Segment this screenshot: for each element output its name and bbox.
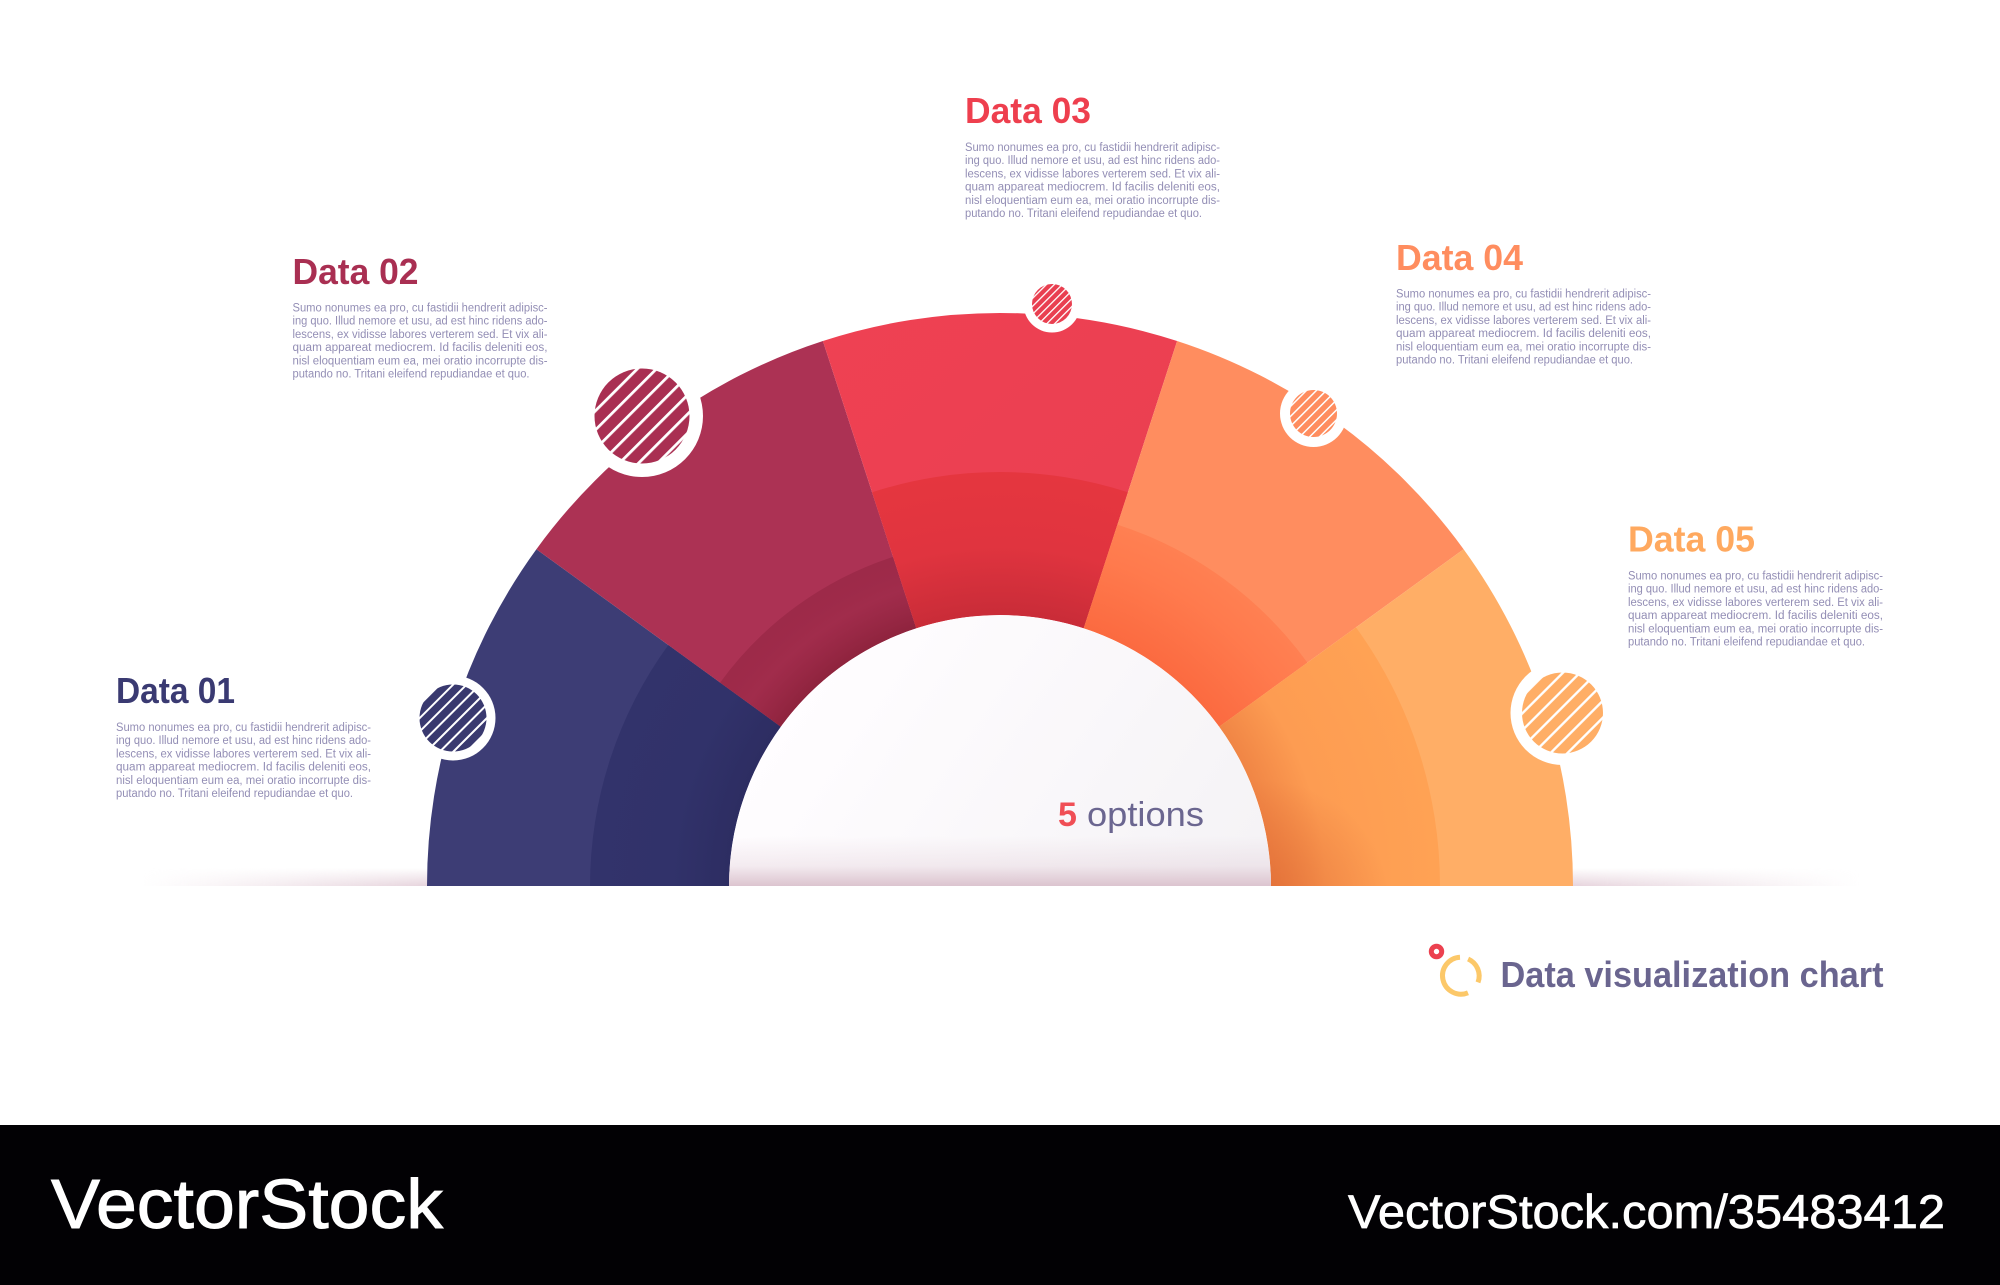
segment: Data 02 [536, 341, 916, 727]
text block: Data 04: putando no. Tritani eleifend repudiandae et quo. [1396, 354, 1633, 366]
text block: Data 05: lescens, ex vidisse labores verterem sed. Et vix ali- [1628, 597, 1883, 609]
text block: Data 04: ing quo. Illud nemore et usu, ad est hinc ridens ado- [1396, 302, 1651, 314]
text block: Data 02: Data 02 [292, 251, 418, 292]
marker: Data 02 hatched circle [581, 355, 703, 477]
text block: Data 05: Sumo nonumes ea pro, cu fastidii hendrerit adipisc- [1628, 570, 1883, 582]
text block: Data 05: putando no. Tritani eleifend repudiandae et quo. [1628, 636, 1865, 648]
text block: Data 02: ing quo. Illud nemore et usu, ad est hinc ridens ado- [292, 316, 548, 328]
text block: Data 03: Data 03 [965, 90, 1091, 131]
segment: Data 05 [1219, 549, 1573, 886]
text block: Data 02: nisl eloquentiam eum ea, mei oratio incorrupte dis- [292, 355, 548, 367]
text block: Data 02 [292, 251, 548, 380]
text block: Data 05: Data 05 [1628, 518, 1755, 560]
text block: Data 01: nisl eloquentiam eum ea, mei oratio incorrupte dis- [116, 775, 371, 787]
title: Data visualization chart: Data visualization chart [1500, 954, 1884, 995]
text block: Data 01 [116, 670, 371, 800]
text block: Data 02: putando no. Tritani eleifend repudiandae et quo. [292, 368, 530, 380]
centre label: 5 options: 5 [1058, 796, 1077, 834]
text block: Data 04: lescens, ex vidisse labores verterem sed. Et vix ali- [1396, 315, 1651, 327]
marker: Data 01 hatched circle [410, 676, 496, 760]
text block: Data 01: Data 01 [116, 670, 235, 711]
text block: Data 01: lescens, ex vidisse labores verterem sed. Et vix ali- [116, 748, 371, 760]
text block: Data 04 [1396, 237, 1651, 366]
text block: Data 01: quam appareat mediocrem. Id facilis deleniti eos, [116, 762, 371, 774]
text block: Data 03: quam appareat mediocrem. Id facilis deleniti eos, [965, 182, 1220, 194]
footer brand: VectorStock [51, 1165, 444, 1243]
text block: Data 01: putando no. Tritani eleifend repudiandae et quo. [116, 788, 353, 800]
text block: Data 05 [1628, 518, 1883, 648]
text block: Data 04: Data 04 [1396, 237, 1523, 278]
icon: chart logo rings [1431, 946, 1479, 994]
text block: Data 01: Sumo nonumes ea pro, cu fastidii hendrerit adipisc- [116, 722, 371, 734]
marker: Data 03 hatched circle [1024, 276, 1080, 332]
text block: Data 03: nisl eloquentiam eum ea, mei oratio incorrupte dis- [965, 195, 1220, 207]
text block: Data 05: quam appareat mediocrem. Id facilis deleniti eos, [1628, 610, 1883, 622]
text block: Data 04: Sumo nonumes ea pro, cu fastidii hendrerit adipisc- [1396, 288, 1651, 300]
marker: Data 05 hatched circle [1510, 661, 1614, 765]
segment: Data 04 [1084, 341, 1464, 727]
marker: Data 04 hatched circle [1280, 380, 1347, 447]
text block: Data 05: nisl eloquentiam eum ea, mei oratio incorrupte dis- [1628, 623, 1883, 635]
text block: Data 04: quam appareat mediocrem. Id facilis deleniti eos, [1396, 328, 1651, 340]
text block: Data 03: Sumo nonumes ea pro, cu fastidii hendrerit adipisc- [965, 142, 1220, 154]
text block: Data 03: putando no. Tritani eleifend repudiandae et quo. [965, 208, 1202, 220]
text block: Data 01: ing quo. Illud nemore et usu, ad est hinc ridens ado- [116, 735, 371, 747]
segment: Data 01 [427, 549, 781, 886]
text block: Data 03: ing quo. Illud nemore et usu, ad est hinc ridens ado- [965, 155, 1220, 167]
text block: Data 04: nisl eloquentiam eum ea, mei oratio incorrupte dis- [1396, 341, 1651, 353]
text block: Data 05: ing quo. Illud nemore et usu, ad est hinc ridens ado- [1628, 584, 1883, 596]
text block: Data 02: Sumo nonumes ea pro, cu fastidii hendrerit adipisc- [292, 302, 548, 314]
floor shadow under chart [199, 872, 1800, 886]
centre label: 5 options: options [1087, 796, 1204, 834]
semicircle chart [427, 313, 1573, 886]
footer bar [0, 1125, 2000, 1285]
segment: Data 03 [823, 313, 1177, 628]
text block: Data 02: quam appareat mediocrem. Id facilis deleniti eos, [292, 342, 548, 354]
text block: Data 03 [965, 90, 1220, 220]
text block: Data 02: lescens, ex vidisse labores verterem sed. Et vix ali- [292, 329, 548, 341]
footer url: VectorStock.com/35483412 [1348, 1185, 1945, 1238]
centre half disc [729, 615, 1271, 886]
text block: Data 03: lescens, ex vidisse labores verterem sed. Et vix ali- [965, 168, 1220, 180]
